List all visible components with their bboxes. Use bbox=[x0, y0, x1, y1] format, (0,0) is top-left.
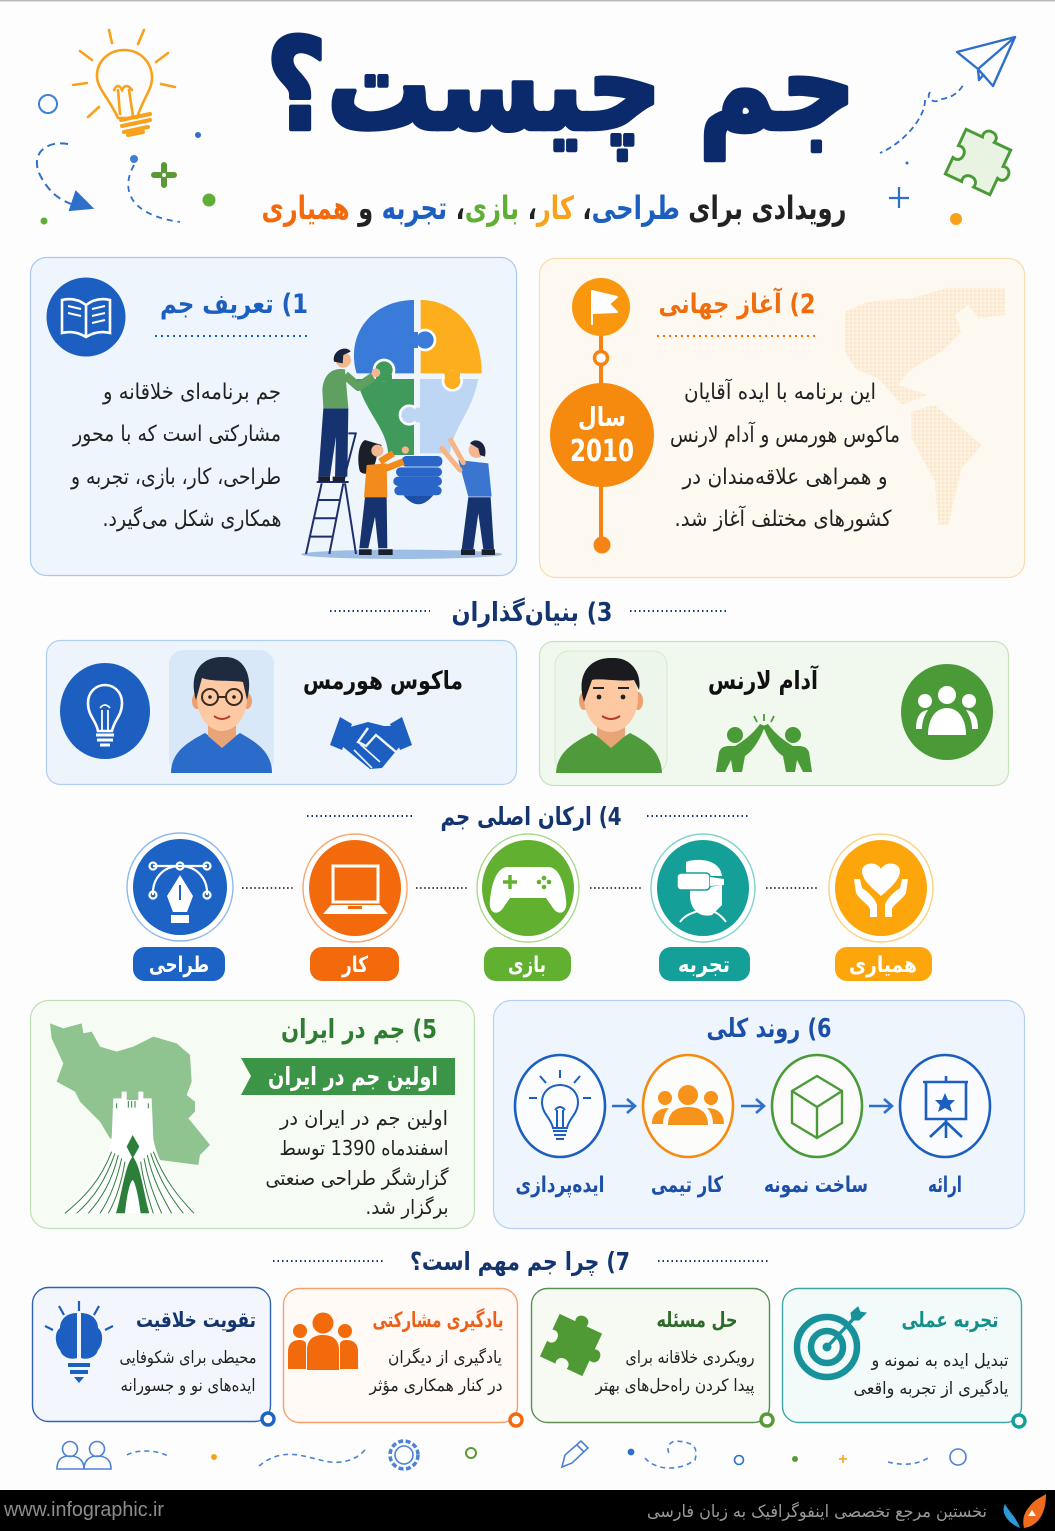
definition text: جم برنامه‌ای خلاقانه و bbox=[102, 380, 281, 405]
Iran text: برگزار شد. bbox=[366, 1195, 448, 1219]
decorative icons row bbox=[57, 1441, 966, 1469]
pillars connectors bbox=[242, 887, 818, 889]
pill label: همیاری bbox=[849, 953, 917, 978]
card: practical experience bbox=[782, 1288, 1025, 1427]
step: presentation: ارائه bbox=[928, 1173, 962, 1198]
panel: definition bbox=[30, 258, 516, 576]
card text bbox=[369, 1347, 502, 1396]
definition text: طراحی، کار، بازی، تجربه و bbox=[70, 465, 281, 490]
panel: founder Max Hormes bbox=[46, 640, 516, 784]
step: team work bbox=[643, 1055, 733, 1198]
ribbon: اولین جم در ایران bbox=[268, 1062, 438, 1092]
dots and plus doodles left bbox=[40, 132, 216, 224]
card text: یادگیری از تجربه واقعی bbox=[854, 1378, 1009, 1399]
decorative circle left bbox=[39, 95, 57, 113]
icon: puzzle piece bbox=[540, 1306, 613, 1380]
timeline with flag and year bbox=[550, 278, 654, 554]
card: collaborative learning: یادگیری مشارکتی bbox=[372, 1307, 504, 1332]
doodles right bbox=[889, 162, 962, 225]
pillar: experience bbox=[651, 834, 755, 981]
card: practical experience: تجربه عملی bbox=[902, 1308, 998, 1332]
panel: overall process bbox=[494, 1000, 1024, 1228]
map of Iran and Azadi tower bbox=[50, 1023, 210, 1213]
card text: پیدا کردن راه‌حل‌های بهتر bbox=[595, 1376, 755, 1396]
puzzle piece green bbox=[945, 122, 1022, 198]
icon: bulb bbox=[60, 663, 150, 759]
Iran text bbox=[266, 1106, 449, 1219]
heading 3: founders: 3) بنیان‌گذاران bbox=[452, 597, 612, 628]
definition text: همکاری شکل می‌گیرد. bbox=[102, 506, 282, 532]
Iran text: اسفندماه 1390 توسط bbox=[280, 1136, 448, 1160]
step: prototype bbox=[764, 1055, 868, 1198]
icon: brain bulb bbox=[45, 1301, 113, 1383]
Iran text: اولین جم در ایران در bbox=[279, 1106, 448, 1130]
icon: open book bbox=[46, 278, 126, 356]
global start text: کشورهای مختلف آغاز شد. bbox=[674, 505, 892, 532]
footer bar bbox=[0, 1490, 1055, 1531]
portrait: Adam Lawrence bbox=[555, 651, 667, 773]
site url: www.infographic.ir bbox=[3, 1499, 164, 1521]
card text: محیطی برای شکوفایی bbox=[120, 1348, 256, 1368]
icon: light bulb doodle bbox=[73, 30, 175, 135]
pill label: کار bbox=[341, 953, 368, 978]
panel: GEM in Iran bbox=[30, 1000, 474, 1228]
icon: team bbox=[901, 664, 993, 760]
illustration: people building a puzzle bulb bbox=[301, 300, 502, 559]
definition text bbox=[70, 380, 281, 532]
name: ماکوس هورمس bbox=[303, 666, 463, 696]
panel: founder Adam Lawrence bbox=[540, 642, 1008, 786]
timeline with flag and year: سال bbox=[578, 403, 626, 433]
global start text bbox=[670, 378, 900, 532]
card: collaborative learning bbox=[284, 1288, 522, 1426]
pill label: طراحی bbox=[149, 953, 209, 978]
card: boosting creativity bbox=[32, 1288, 274, 1425]
icon: handshake bbox=[330, 717, 412, 769]
icon: target bbox=[797, 1307, 866, 1377]
global start text: ماکوس هورمس و آدام لارنس bbox=[670, 421, 900, 448]
heading 2: 2) آغاز جهانی bbox=[658, 287, 816, 320]
card text: رویکردی خلاقانه برای bbox=[626, 1348, 754, 1368]
card text: یادگیری از دیگران bbox=[388, 1347, 502, 1368]
portrait: Max Hormes bbox=[169, 650, 274, 773]
card: problem solving bbox=[532, 1288, 773, 1426]
card text bbox=[595, 1348, 755, 1396]
pill label bbox=[133, 947, 225, 981]
panel: global start bbox=[540, 258, 1024, 578]
arrow bbox=[741, 1099, 764, 1113]
step: prototype: ساخت نمونه bbox=[764, 1173, 868, 1198]
icon: people bbox=[288, 1312, 358, 1370]
title: جم چیست؟ bbox=[266, 11, 856, 160]
definition text: مشارکتی است که با محور bbox=[72, 422, 281, 447]
heading 6: 6) روند کلی bbox=[706, 1014, 832, 1044]
logo bbox=[1004, 1494, 1046, 1528]
pill label bbox=[835, 947, 932, 981]
tagline: نخستین مرجع تخصصی اینفوگرافیک به زبان فارسی bbox=[647, 1501, 987, 1522]
pill label: بازی bbox=[508, 953, 546, 978]
card text: در کنار همکاری مؤثر bbox=[369, 1376, 502, 1396]
step: presentation bbox=[900, 1055, 990, 1198]
card text bbox=[120, 1348, 256, 1396]
dotted world map bbox=[845, 288, 1005, 525]
heading 5: 5) جم در ایران bbox=[281, 1015, 437, 1045]
dashed curved arrow bbox=[37, 143, 92, 210]
icon: high five bbox=[716, 714, 812, 772]
heading 1: 1) تعریف جم bbox=[160, 289, 308, 320]
global start text: و همراهی علاقه‌مندان در bbox=[682, 465, 888, 490]
step: ideation bbox=[515, 1055, 605, 1198]
pill label bbox=[310, 947, 399, 981]
pillar: collaboration bbox=[829, 834, 933, 981]
timeline with flag and year: 2010 bbox=[570, 434, 634, 469]
arrow bbox=[869, 1099, 892, 1113]
pillar: play bbox=[477, 834, 579, 981]
pillar: design bbox=[127, 833, 233, 981]
subtitle: رویدادی برای طراحی، کار، بازی، تجربه و همیاری bbox=[262, 189, 846, 227]
Iran text: گزارشگر طراحی صنعتی bbox=[266, 1166, 449, 1190]
card: boosting creativity: تقویت خلاقیت bbox=[136, 1308, 256, 1332]
card text bbox=[854, 1351, 1009, 1399]
ribbon bbox=[241, 1058, 455, 1095]
heading 4: main pillars: 4) ارکان اصلی جم bbox=[440, 802, 622, 831]
pill label: تجربه bbox=[678, 953, 730, 978]
card text: تبدیل ایده به نمونه و bbox=[871, 1351, 1009, 1371]
pill label bbox=[484, 947, 571, 981]
heading 7: why GEM matters: 7) چرا جم مهم است؟ bbox=[410, 1247, 630, 1277]
card: problem solving: حل مسئله bbox=[656, 1308, 738, 1332]
global start text: این برنامه با ایده آقایان bbox=[684, 378, 876, 405]
arrow bbox=[612, 1099, 635, 1113]
paper plane bbox=[880, 37, 1015, 153]
card text: ایده‌های نو و جسورانه bbox=[120, 1376, 256, 1396]
name: آدام لارنس bbox=[708, 665, 819, 695]
step: ideation: ایده‌پردازی bbox=[516, 1173, 604, 1198]
step: team work: کار تیمی bbox=[651, 1173, 723, 1198]
pillar: work bbox=[303, 834, 407, 981]
pill label bbox=[659, 947, 750, 981]
